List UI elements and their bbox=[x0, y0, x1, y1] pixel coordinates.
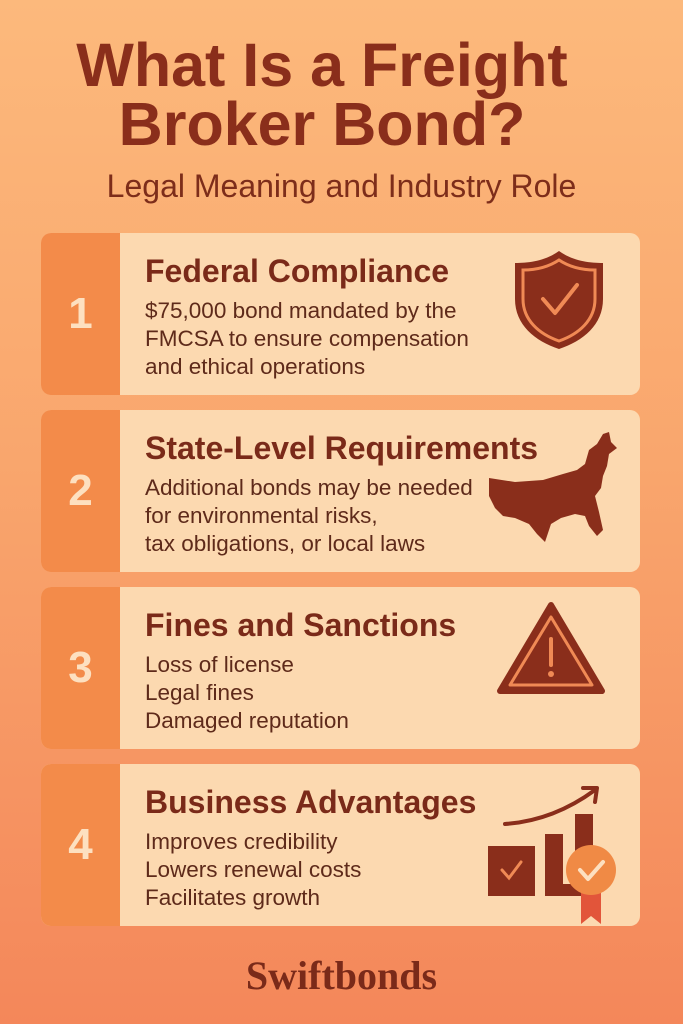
number 3 bbox=[41, 587, 120, 749]
text: Damaged reputation bbox=[145, 708, 349, 733]
text: Loss of license bbox=[145, 652, 294, 677]
text bbox=[145, 652, 349, 733]
panel: state-level requirements bbox=[41, 410, 640, 572]
text bbox=[145, 475, 473, 556]
panel: fines and sanctions bbox=[41, 587, 640, 749]
icon: shield bbox=[515, 251, 603, 349]
heading: State-Level Requirements bbox=[145, 430, 538, 466]
number 3: 3 bbox=[68, 643, 93, 692]
text: Facilitates growth bbox=[145, 885, 320, 910]
text: FMCSA to ensure compensation bbox=[145, 326, 469, 351]
icon: US map bbox=[489, 432, 617, 542]
number 2: 2 bbox=[68, 466, 93, 515]
panel: federal compliance bbox=[41, 233, 640, 395]
text bbox=[145, 298, 469, 379]
icon: warning bbox=[497, 602, 605, 694]
number 4: 4 bbox=[68, 820, 93, 869]
text bbox=[145, 829, 361, 910]
text: Improves credibility bbox=[145, 829, 338, 854]
number 1: 1 bbox=[68, 289, 93, 338]
number 2 bbox=[41, 410, 120, 572]
brand footer: Swiftbonds bbox=[246, 953, 437, 998]
text: Lowers renewal costs bbox=[145, 857, 361, 882]
text: $75,000 bond mandated by the bbox=[145, 298, 457, 323]
text: Legal fines bbox=[145, 680, 254, 705]
title: What Is a Freight bbox=[76, 31, 568, 99]
text: for environmental risks, bbox=[145, 503, 378, 528]
title: Broker Bond? bbox=[119, 90, 525, 158]
subtitle: Legal Meaning and Industry Role bbox=[107, 168, 576, 204]
number 1 bbox=[41, 233, 120, 395]
text: Additional bonds may be needed bbox=[145, 475, 473, 500]
panel: business advantages bbox=[41, 764, 640, 926]
text: and ethical operations bbox=[145, 354, 365, 379]
number 4 bbox=[41, 764, 120, 926]
icon: growth chart bbox=[488, 786, 616, 924]
heading: Federal Compliance bbox=[145, 253, 449, 289]
heading: Business Advantages bbox=[145, 784, 476, 820]
title bbox=[76, 31, 568, 158]
text: tax obligations, or local laws bbox=[145, 531, 425, 556]
heading: Fines and Sanctions bbox=[145, 607, 456, 643]
